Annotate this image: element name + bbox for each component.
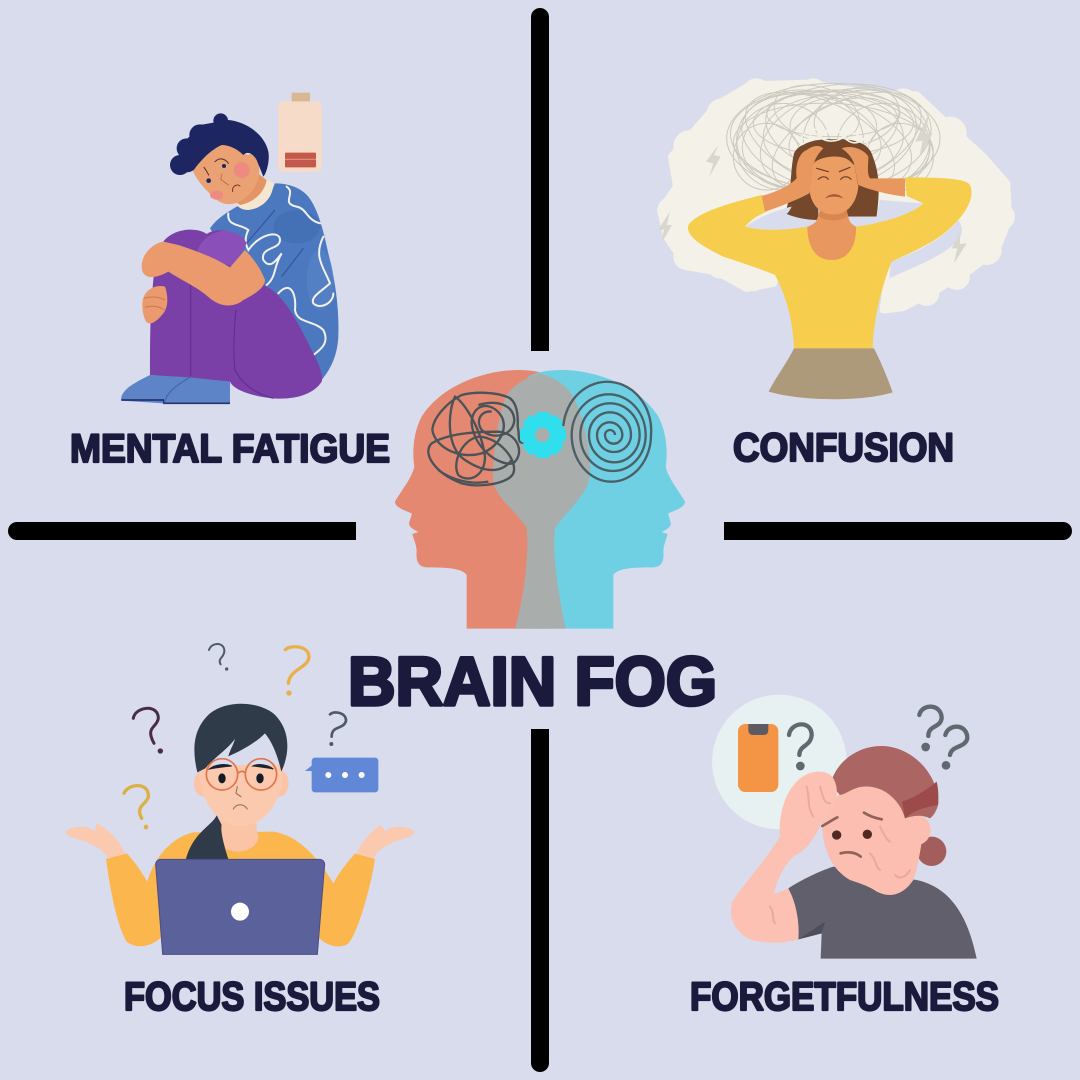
gap in cloud behind arm: [889, 220, 962, 278]
speech bubble: [305, 758, 378, 792]
question marks: [789, 707, 967, 755]
hair: [832, 746, 938, 818]
divider: bottom vertical bar: [531, 729, 549, 1072]
scribble: [725, 71, 940, 212]
face: [809, 156, 858, 215]
arm and hand: [731, 772, 837, 943]
title: brain fog: BRAIN FOG: [348, 643, 717, 720]
hands: [762, 146, 823, 212]
illustration: confused woman with scribble cloud: [657, 71, 1015, 399]
divider: right horizontal bar: [724, 522, 1072, 540]
chin shadow: [819, 210, 848, 220]
boots: [121, 375, 230, 403]
spiral: [563, 382, 651, 482]
illustration: forgetful woman remembering a phone: [712, 695, 977, 959]
thought cloud: [657, 78, 1015, 310]
divider: top vertical bar: [531, 8, 549, 351]
overlap: grey centre: [493, 373, 590, 629]
ponytail: [186, 815, 228, 859]
hair back: [785, 139, 879, 220]
thought bubble: [712, 695, 847, 829]
gear icon: [520, 412, 566, 458]
glasses and face: [206, 759, 277, 809]
sweater and arms: [688, 177, 971, 348]
neck and collar: [237, 177, 273, 210]
arms: [142, 242, 265, 305]
head: [193, 143, 259, 204]
tangled scribble: [428, 393, 523, 485]
label: confusion: CONFUSION: [733, 426, 954, 470]
head: right blue silhouette: [528, 370, 685, 629]
illustration: focus issues person at laptop: [65, 644, 415, 954]
illustration: brain fog twin heads: [395, 370, 685, 629]
lightning bolts: [658, 113, 967, 263]
hands: [65, 823, 125, 858]
head: left red silhouette: [395, 370, 552, 629]
icon: low battery: [278, 93, 322, 172]
divider: left horizontal bar: [8, 522, 356, 540]
head: [194, 770, 213, 797]
legs: [150, 230, 322, 399]
phone icon: [738, 724, 778, 792]
t-shirt: [788, 867, 977, 959]
skirt: [769, 348, 893, 399]
hair: [170, 113, 269, 177]
background gaps between arms and neck: [745, 200, 923, 230]
illustration: mental fatigue person with low battery: [121, 93, 338, 403]
neck: [218, 812, 258, 852]
shirt: [210, 183, 338, 380]
label: forgetfulness: FORGETFULNESS: [690, 975, 999, 1019]
expression: [817, 167, 851, 179]
hair bun: [917, 837, 946, 866]
scribble crown: [798, 129, 868, 145]
neck: [807, 210, 856, 260]
body sweater and arms: [106, 832, 375, 946]
head: [822, 785, 923, 895]
label: mental fatigue: MENTAL FATIGUE: [70, 427, 390, 471]
face details: [204, 159, 228, 175]
face: [832, 830, 841, 840]
laptop: [156, 859, 325, 954]
hair: [194, 704, 287, 772]
question marks: [124, 644, 346, 829]
label: focus issues: FOCUS ISSUES: [124, 975, 380, 1019]
